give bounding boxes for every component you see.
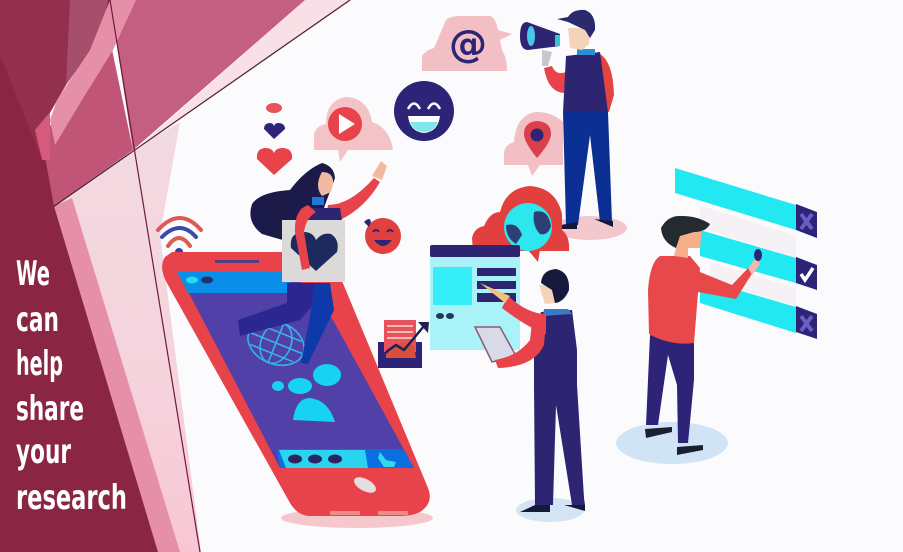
bottom hearts (288, 454, 342, 464)
face (318, 172, 333, 196)
shoes (520, 505, 585, 512)
top bar dots (186, 276, 198, 284)
megaphone inner (527, 26, 535, 46)
phone (162, 252, 430, 516)
woman with heart picture (238, 161, 387, 364)
legs (646, 335, 694, 443)
panel: geometric maroon and pink background (0, 0, 352, 552)
x mark 2 (801, 316, 812, 331)
back leg (238, 283, 332, 336)
globe on screen (241, 313, 311, 373)
back arm sleeve (598, 54, 614, 112)
icon: at sign speech cloud: @ (449, 22, 487, 66)
front arm (544, 66, 566, 93)
hand (748, 258, 760, 275)
collar (543, 309, 572, 316)
small hearts (436, 313, 454, 319)
marker (754, 249, 762, 261)
shadow (516, 498, 584, 522)
icon: location pin speech cloud (504, 112, 563, 176)
box check (796, 257, 817, 290)
picture card (282, 220, 345, 282)
phone shadow (281, 508, 433, 528)
clipboard (475, 327, 516, 362)
icon: laughing emoji (394, 81, 454, 141)
holding arm (495, 322, 546, 368)
legs (563, 112, 612, 225)
collar (577, 49, 595, 55)
megaphone bell end (555, 35, 560, 46)
heading: we can help share your research: can (16, 300, 59, 340)
checklist bars (675, 168, 817, 339)
pointing hand (480, 283, 510, 303)
man with clipboard (475, 269, 585, 522)
icon: video speech cloud (314, 97, 393, 162)
cap (557, 10, 595, 38)
cyan chat bubbles (272, 364, 341, 422)
hand (372, 161, 387, 180)
collar (312, 197, 324, 205)
phone speaker (215, 260, 259, 263)
head (568, 28, 590, 50)
page body (430, 256, 520, 350)
shadow (553, 216, 627, 240)
bottom bar cyan strip (279, 450, 368, 468)
icon: wifi signal (158, 218, 201, 256)
hair (250, 163, 335, 248)
icon: chart envelope (378, 320, 429, 368)
x mark 1 (801, 214, 812, 229)
torso and legs (534, 310, 585, 505)
heading: we can help share your research: your (16, 432, 71, 472)
phone screen (178, 272, 414, 468)
icon: winking emoji (364, 218, 401, 254)
shoes (561, 219, 613, 229)
front leg (301, 283, 334, 364)
torso (300, 208, 345, 245)
text lines (477, 268, 516, 302)
image block (433, 267, 472, 305)
torso (563, 52, 608, 112)
torso (648, 256, 700, 344)
arm across card (295, 205, 316, 270)
icon: hearts (257, 103, 292, 175)
icon: at sign speech cloud (422, 16, 512, 71)
megaphone grip (542, 50, 552, 66)
shadow (616, 422, 728, 464)
phone side buttons (330, 511, 408, 515)
arm (695, 266, 753, 299)
pale bar backgrounds (700, 205, 796, 306)
globe speech cloud (472, 186, 569, 262)
bar 2 (700, 230, 796, 283)
hair (541, 269, 569, 303)
check mark (801, 268, 813, 280)
heart on card (291, 232, 338, 271)
box x 1 (796, 204, 817, 238)
face (539, 285, 555, 304)
bar 1 (675, 168, 796, 230)
box x 2 (796, 306, 817, 339)
neck and face (674, 230, 702, 258)
home button (352, 474, 378, 496)
man checking list (616, 216, 762, 464)
heading: we can help share your research: share (16, 389, 84, 429)
bar 3 (700, 279, 796, 333)
phone body (162, 252, 430, 516)
pointing arm (502, 296, 546, 334)
heading: we can help share your research: We (16, 254, 50, 294)
man with megaphone (520, 10, 627, 240)
bottom bar of screen (277, 449, 414, 468)
raised arm (326, 178, 380, 220)
heading: we can help share your research (16, 254, 127, 518)
bottom bar symbol (378, 452, 396, 467)
shoes (645, 427, 703, 455)
top bar of screen (177, 272, 292, 293)
hair (661, 216, 710, 248)
megaphone (520, 22, 560, 50)
heading: we can help share your research: research (16, 478, 127, 518)
title bar (430, 245, 520, 257)
web page panel (430, 245, 520, 350)
heading: we can help share your research: help (16, 344, 63, 384)
